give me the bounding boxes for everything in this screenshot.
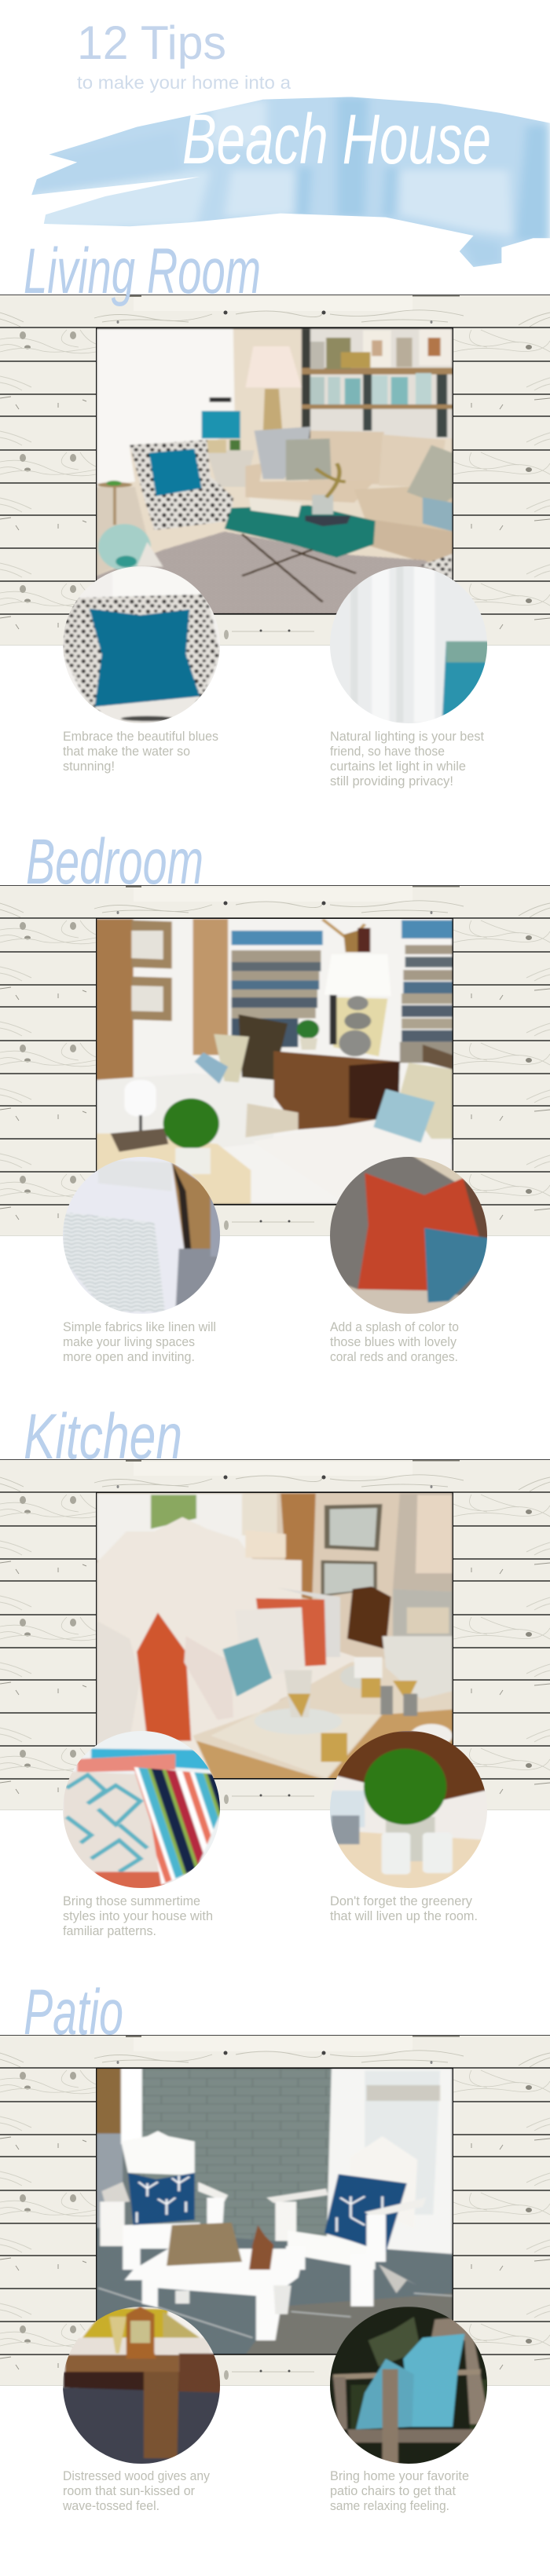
tip: splash of color xyxy=(330,1320,459,1364)
tip: patio chairs xyxy=(330,2469,469,2513)
tip: summertime styles xyxy=(63,1894,213,1938)
curtains xyxy=(97,328,235,487)
tip: summertime styles: styles into your house with xyxy=(63,1909,213,1923)
heading: Bedroom: Bedroom xyxy=(26,826,204,898)
photo: kitchen xyxy=(97,1492,453,1780)
dresser xyxy=(273,1051,400,1129)
sofa xyxy=(245,430,453,562)
title block xyxy=(31,25,550,267)
tip: distressed wood xyxy=(62,2469,211,2513)
wood plank background xyxy=(0,1459,550,1810)
small table xyxy=(97,481,132,525)
inset: linen bedding xyxy=(60,1154,225,1314)
tip: summertime styles: Bring those summertime xyxy=(63,1894,200,1908)
cushions xyxy=(255,426,453,532)
tip: greenery: that will liven up the room. xyxy=(330,1909,478,1923)
lamp xyxy=(245,346,302,432)
panel: kitchen xyxy=(0,1401,550,1938)
tip: splash of color: coral reds and oranges. xyxy=(330,1350,458,1364)
basket xyxy=(245,1103,298,1137)
table xyxy=(193,1636,453,1780)
dark pillow xyxy=(239,1015,288,1080)
rug xyxy=(97,532,453,614)
tip: embrace the blues: that make the water so xyxy=(63,745,190,759)
tip: splash of color: Add a splash of color to xyxy=(330,1320,459,1334)
right coral pillow xyxy=(324,2174,407,2252)
window and curtains xyxy=(97,1494,277,1561)
wood plank background xyxy=(0,2035,550,2386)
tip: distressed wood: Distressed wood gives any xyxy=(63,2469,211,2483)
lamp with painting xyxy=(328,994,388,1057)
clock cabinet xyxy=(280,1494,316,1600)
tip: greenery xyxy=(330,1894,478,1923)
wood plank background xyxy=(0,295,550,646)
chair corner xyxy=(421,554,453,581)
tip: summertime styles: familiar patterns. xyxy=(63,1924,156,1938)
tip: patio chairs: patio chairs to get that xyxy=(330,2484,456,2498)
white table xyxy=(124,2249,305,2340)
armchair xyxy=(130,440,233,530)
wood plank background xyxy=(0,885,550,1236)
tip: patio chairs: same relaxing feeling. xyxy=(330,2499,449,2513)
basket xyxy=(167,2223,242,2266)
gray siding xyxy=(141,2068,332,2283)
white post xyxy=(121,2068,142,2144)
tip: simple fabrics: more open and inviting. xyxy=(63,1350,195,1364)
tip: natural lighting: still providing privacy! xyxy=(330,774,453,789)
settee headboard xyxy=(97,1517,372,1780)
heading: Patio: Patio xyxy=(24,1977,123,2048)
slate floor xyxy=(97,2228,453,2355)
shelves xyxy=(302,328,453,438)
left coral pillow xyxy=(128,2173,195,2225)
brown chair xyxy=(347,1586,391,1649)
side table and painting xyxy=(202,397,255,487)
left blinds xyxy=(232,931,323,1047)
tip: patio chairs: Bring home your favorite xyxy=(330,2469,469,2483)
potted plant xyxy=(297,1020,319,1050)
tip: splash of color: those blues with lovely xyxy=(330,1335,457,1349)
lantern xyxy=(249,2225,273,2270)
left chair xyxy=(100,2131,228,2270)
tip: distressed wood: room that sun-kissed or xyxy=(63,2484,195,2498)
side table decor xyxy=(97,1080,251,1204)
framed prints xyxy=(321,1504,383,1597)
back pillows xyxy=(235,1588,340,1675)
right pillows xyxy=(373,1045,453,1143)
heading: Kitchen: Kitchen xyxy=(24,1401,182,1473)
tip: natural lighting: friend, so have those xyxy=(330,745,445,759)
tip: simple fabrics xyxy=(63,1320,216,1364)
inset: patio chair pillows xyxy=(326,2307,491,2466)
photo: patio xyxy=(97,2068,453,2355)
watercolor brush stroke xyxy=(31,97,550,267)
ottoman xyxy=(225,463,376,602)
front pillows xyxy=(97,1612,272,1780)
right bed xyxy=(336,1118,377,1127)
tip: distressed wood: wave-tossed feel. xyxy=(62,2499,160,2513)
glass ball xyxy=(98,524,163,570)
panel: patio xyxy=(0,1977,550,2513)
inset: sheer curtains xyxy=(326,565,491,725)
tip: simple fabrics: Simple fabrics like linen will xyxy=(63,1320,216,1334)
tip: simple fabrics: make your living spaces xyxy=(63,1335,195,1349)
right chair xyxy=(266,2136,417,2307)
tip: greenery: Don't forget the greenery xyxy=(330,1894,473,1908)
tip: embrace the blues xyxy=(63,730,218,774)
door and cabinet xyxy=(393,1494,453,1652)
tip: embrace the blues: Embrace the beautiful blues xyxy=(63,730,218,744)
panel: living room xyxy=(0,236,550,789)
inset: patterned pillows xyxy=(60,1728,225,1890)
panel: bedroom xyxy=(0,826,550,1364)
left bed xyxy=(97,1034,272,1085)
tip: natural lighting: Natural lighting is your best xyxy=(330,730,484,744)
tip: natural lighting xyxy=(330,730,484,789)
tip: natural lighting: curtains let light in while xyxy=(330,759,466,774)
heading: 12 Tips: 12 Tips xyxy=(77,16,226,69)
inset: coral pillow xyxy=(326,1154,491,1314)
tip: embrace the blues: stunning! xyxy=(63,759,115,774)
door xyxy=(326,2068,453,2256)
heading: Living Room: Living Room xyxy=(24,236,261,307)
subheading: to make your home into a xyxy=(77,72,291,93)
photo: bedroom xyxy=(97,917,453,1204)
interior sliver xyxy=(97,2068,123,2228)
doors and framed prints xyxy=(97,919,228,1081)
inset: teal pillow on chair xyxy=(60,565,228,725)
lampshade xyxy=(245,1530,286,1557)
inset: topiary greenery xyxy=(326,1728,491,1890)
photo: living room xyxy=(97,328,453,614)
inset: distressed wood table xyxy=(60,2307,225,2466)
right blinds xyxy=(400,920,453,1063)
antlers xyxy=(323,920,370,952)
